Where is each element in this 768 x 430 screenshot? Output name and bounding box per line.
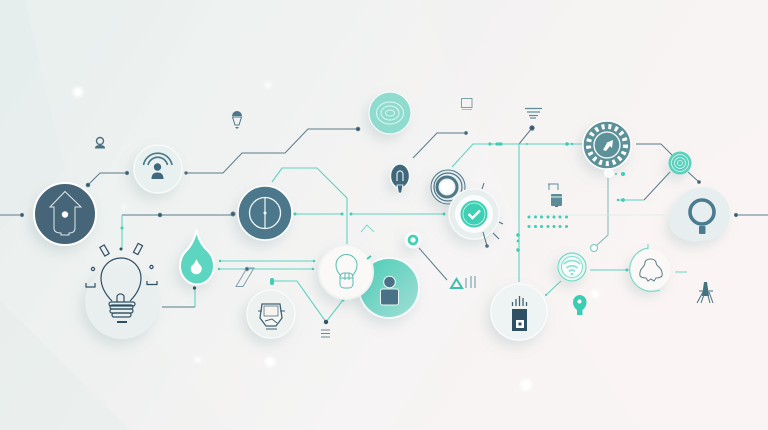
- icon: document: [548, 184, 562, 207]
- node: bell: [630, 244, 687, 291]
- small teal pill: [270, 278, 274, 285]
- node: check mark: [449, 183, 503, 248]
- icon: small dark bulb: [390, 164, 410, 193]
- small open ring: [590, 244, 598, 252]
- node: wifi: [557, 252, 587, 282]
- icon: small person: [95, 138, 105, 148]
- node: teal person: [359, 258, 419, 318]
- icon: hanging lamp: [232, 111, 242, 129]
- icon: chevron: [361, 225, 374, 232]
- icon: tripod: [697, 282, 713, 303]
- icon: pin: [573, 295, 586, 315]
- icon: monitor: [462, 98, 472, 110]
- node: ring target: [430, 169, 466, 205]
- node: device: [247, 290, 295, 338]
- connector lines: teal: [120, 142, 665, 322]
- icon: slash parallelogram: [236, 267, 254, 286]
- dot rows: [528, 216, 568, 228]
- node: gear: [583, 121, 631, 178]
- node: white bulb: [319, 245, 373, 299]
- node: magnifier: [670, 187, 730, 242]
- icon: wifi bars: [525, 108, 542, 118]
- icon: water drop: [180, 230, 214, 290]
- node: large bulb: [85, 243, 159, 339]
- node: teal target: [369, 92, 411, 134]
- node: house: [34, 183, 96, 245]
- node: dark clock: [238, 186, 292, 240]
- icon: triangle and bars: [451, 276, 475, 288]
- icon: menu lines: [321, 320, 330, 337]
- node: chip: [491, 284, 547, 340]
- connector lines: dark: [0, 126, 768, 307]
- node: fingerprint: [668, 152, 692, 174]
- glow dots: [73, 82, 599, 391]
- node: wifi person: [134, 145, 182, 193]
- node: small ring: [404, 232, 422, 248]
